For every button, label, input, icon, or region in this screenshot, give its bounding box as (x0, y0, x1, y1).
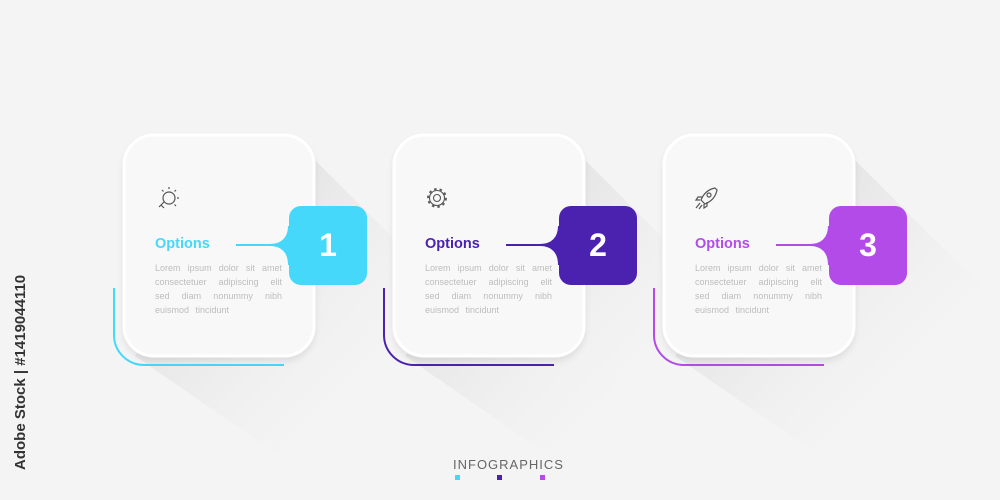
side credit: Adobe Stock | #1419044110 (12, 275, 29, 470)
text 2: sed diam nonummy nibh (425, 291, 552, 301)
legend squares (455, 475, 545, 480)
text 3: consectetuer adipiscing elit (695, 277, 822, 287)
text 2: euismod tincidunt (425, 305, 499, 315)
number 3: 3 (859, 227, 877, 263)
text 3: sed diam nonummy nibh (695, 291, 822, 301)
text 3 (695, 263, 822, 315)
card 3 group (654, 135, 990, 470)
number 1: 1 (319, 227, 337, 263)
text 2: Lorem ipsum dolor sit amet (425, 263, 552, 273)
footer title: INFOGRAPHICS (453, 457, 564, 472)
number 2: 2 (589, 227, 607, 263)
text 1: sed diam nonummy nibh (155, 291, 282, 301)
text 2 (425, 263, 552, 315)
card 2 group (384, 135, 720, 470)
text 1 (155, 263, 282, 315)
text 1: euismod tincidunt (155, 305, 229, 315)
text 1: Lorem ipsum dolor sit amet (155, 263, 282, 273)
options 1: Options (155, 236, 210, 252)
text 2: consectetuer adipiscing elit (425, 277, 552, 287)
text 3: euismod tincidunt (695, 305, 769, 315)
options 2: Options (425, 236, 480, 252)
icon: bulb (159, 187, 179, 208)
options 3: Options (695, 236, 750, 252)
card 1 group (114, 135, 450, 470)
text 1: consectetuer adipiscing elit (155, 277, 282, 287)
icon: rocket (696, 188, 717, 209)
text 3: Lorem ipsum dolor sit amet (695, 263, 822, 273)
icon: gear (428, 189, 446, 207)
